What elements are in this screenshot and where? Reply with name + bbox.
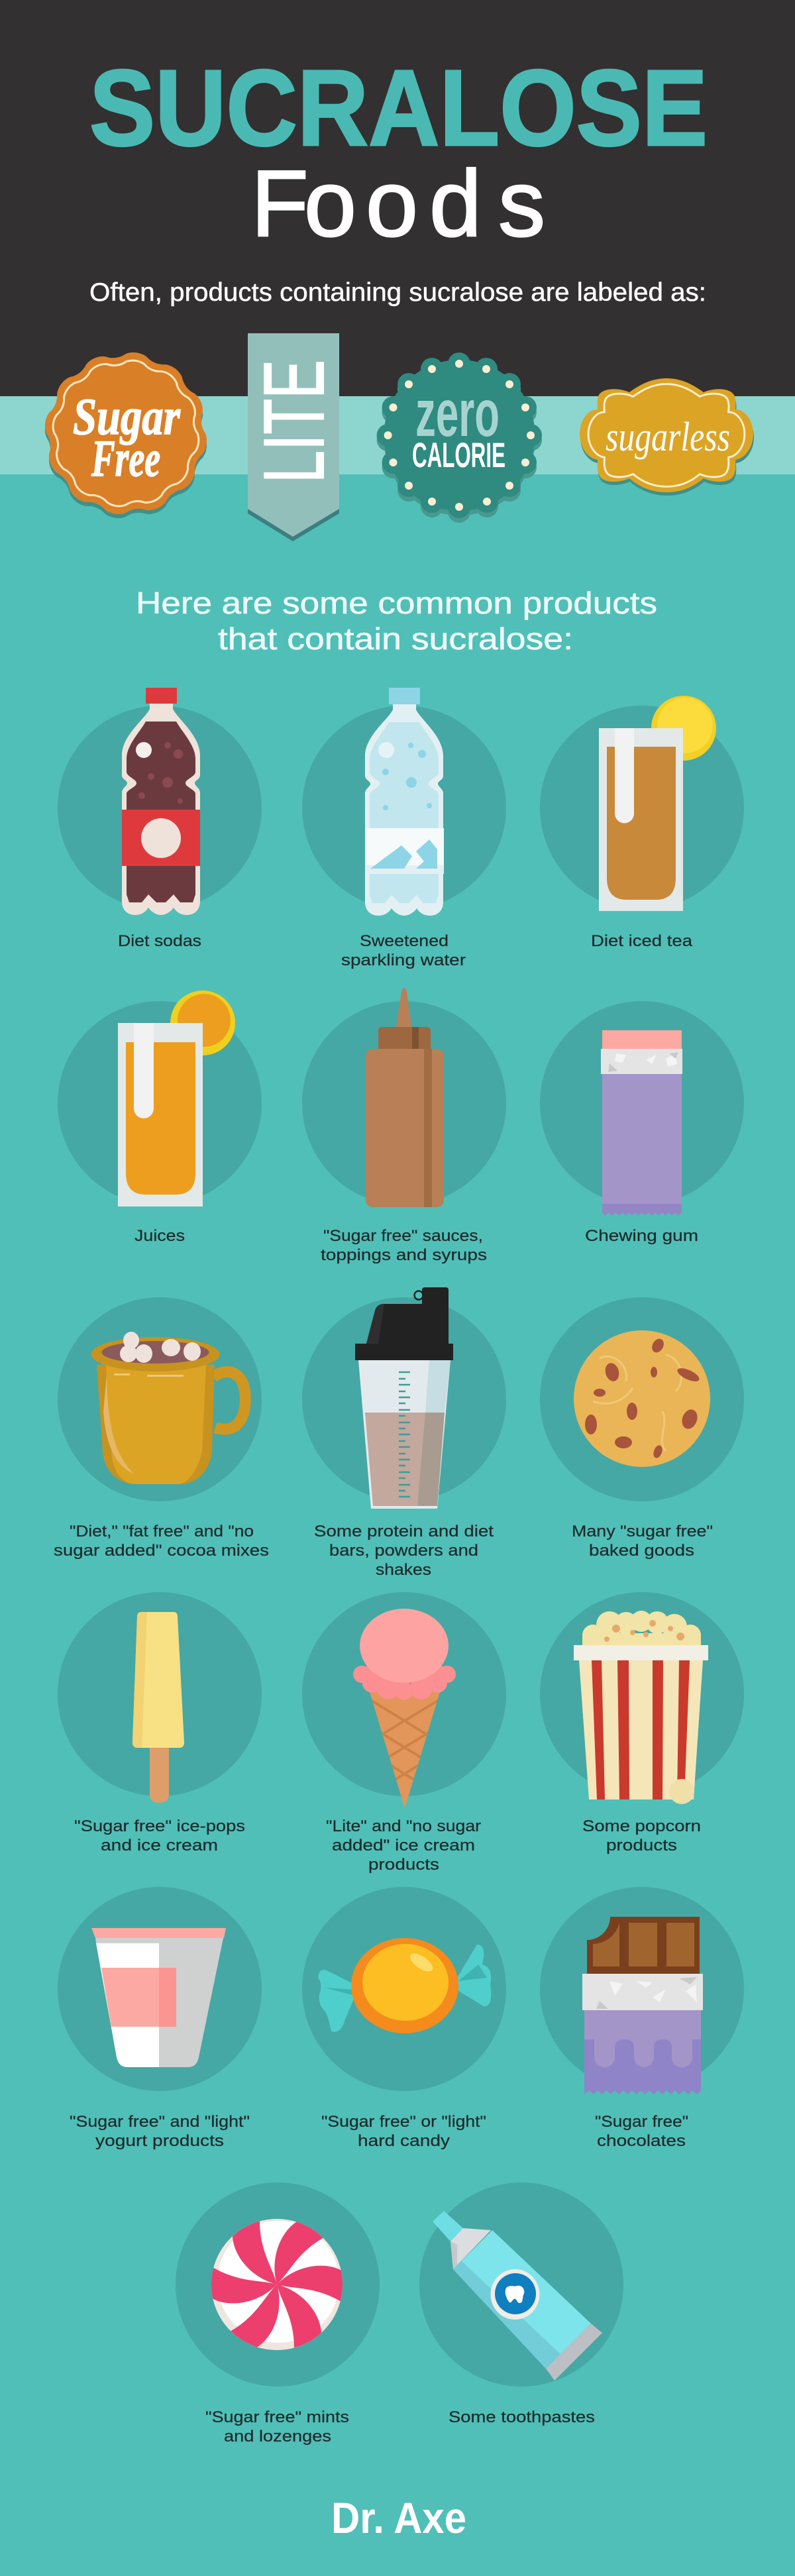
- heading: common products: that contain sucralose:: [218, 621, 573, 656]
- item: cocoa mixes: [54, 1297, 269, 1560]
- item: diet iced tea: [540, 696, 744, 950]
- label: [314, 1523, 494, 1579]
- label: [70, 2113, 250, 2150]
- label: Some toothpastes: [449, 2408, 595, 2426]
- label: products: [606, 1837, 677, 1854]
- icon: gum pack: [601, 1030, 682, 1216]
- icon: protein shaker: [355, 1287, 453, 1509]
- label: [74, 1817, 245, 1854]
- badge: zero calorie: CALORIE: [412, 436, 505, 475]
- label: and lozenges: [224, 2428, 331, 2445]
- icon: wrapped candy: [318, 1938, 491, 2033]
- badge: sugar free: Sugar: [73, 388, 181, 445]
- badge: sugar free: [45, 352, 207, 518]
- item: baked goods: [540, 1297, 744, 1560]
- item: mints: [176, 2182, 380, 2445]
- icon: iced tea glass: [599, 696, 716, 911]
- item: sauces: [302, 988, 506, 1264]
- heading: common products: [136, 586, 657, 656]
- label: baked goods: [589, 1542, 694, 1560]
- item: juices: [58, 991, 262, 1245]
- label: Juices: [134, 1227, 185, 1245]
- title: SUCRALOSE: SUCRALOSE: [89, 47, 708, 168]
- label: [321, 1227, 487, 1264]
- label: "Sugar free" or "light": [321, 2113, 486, 2131]
- label: [341, 932, 466, 969]
- icon: toothpaste tube: [433, 2211, 602, 2381]
- background: dark header: [0, 0, 795, 396]
- label: [326, 1817, 481, 1874]
- label: shakes: [376, 1561, 431, 1579]
- icon: squeeze bottle: [366, 988, 444, 1207]
- icon: soda bottle: [122, 688, 200, 915]
- label: [321, 2113, 486, 2150]
- label: [205, 2408, 349, 2445]
- label: [582, 1817, 701, 1854]
- badge: sugarless: [580, 378, 754, 496]
- label: [572, 1523, 713, 1560]
- item: hard candy: [302, 1887, 506, 2150]
- heading: common products: Here are some common products: [136, 586, 657, 620]
- label: Many "sugar free": [572, 1523, 713, 1540]
- label: "Sugar free" mints: [205, 2408, 349, 2426]
- icon: juice glass: [118, 991, 235, 1207]
- label: toppings and syrups: [321, 1246, 487, 1264]
- subtitle: Often, products containing sucralose are labeled as:: [89, 278, 706, 307]
- icon: cocoa mug: [91, 1332, 245, 1484]
- label: [595, 2113, 688, 2150]
- logo: Dr. Axe: Dr. Axe: [331, 2493, 466, 2542]
- label: Chewing gum: [585, 1227, 698, 1245]
- label: [54, 1523, 269, 1560]
- background: light teal band: [0, 396, 795, 474]
- item: protein shakes: [302, 1287, 506, 1579]
- label: "Sugar free": [595, 2113, 688, 2131]
- icon: peppermint swirl: [200, 2214, 354, 2355]
- icon: ice pop: [132, 1612, 184, 1803]
- label: "Diet," "fat free" and "no: [70, 1523, 254, 1540]
- label: yogurt products: [95, 2132, 224, 2150]
- label: sugar added" cocoa mixes: [54, 1542, 269, 1560]
- label: Some popcorn: [582, 1817, 701, 1835]
- label: added" ice cream: [332, 1837, 475, 1854]
- label: "Sugar free" and "light": [70, 2113, 250, 2131]
- badge: sugar free: Free: [91, 429, 160, 487]
- badge: zero calorie: zero: [415, 376, 500, 451]
- item: toothpastes: [419, 2182, 623, 2426]
- item: popcorn: [540, 1592, 744, 1854]
- label: hard candy: [358, 2132, 450, 2150]
- item: ice-pops: [58, 1592, 262, 1854]
- icon: popcorn bucket: [574, 1611, 708, 1804]
- item: chocolates: [540, 1887, 744, 2150]
- title: Foods: Foods: [251, 151, 545, 256]
- badge: lite ribbon: LITE: [246, 360, 342, 483]
- label: Diet sodas: [118, 932, 201, 950]
- label: "Lite" and "no sugar: [326, 1817, 481, 1835]
- label: "Sugar free" ice-pops: [74, 1817, 245, 1835]
- badge: sugarless: sugarless: [606, 415, 730, 460]
- item: yogurt: [58, 1887, 262, 2150]
- item: ice cream: [302, 1592, 506, 1874]
- icon: yogurt cup: [91, 1928, 226, 2067]
- label: and ice cream: [101, 1837, 218, 1854]
- icon: chocolate bar: [582, 1917, 703, 2094]
- icon: ice cream cone: [353, 1609, 456, 1808]
- label: Some protein and diet: [314, 1523, 494, 1540]
- item: diet sodas: [58, 688, 262, 950]
- label: chocolates: [597, 2132, 686, 2150]
- label: Sweetened: [360, 932, 449, 950]
- label: "Sugar free" sauces,: [323, 1227, 483, 1245]
- icon: water bottle: [365, 688, 444, 916]
- label: bars, powders and: [329, 1542, 478, 1560]
- label: Diet iced tea: [591, 932, 692, 950]
- label: products: [368, 1856, 439, 1874]
- item: chewing gum: [540, 1001, 744, 1245]
- badge: lite ribbon: [246, 333, 342, 541]
- label: sparkling water: [341, 951, 466, 969]
- badge: zero calorie: [377, 352, 542, 523]
- item: sparkling water: [302, 688, 506, 969]
- icon: cookie: [574, 1330, 710, 1467]
